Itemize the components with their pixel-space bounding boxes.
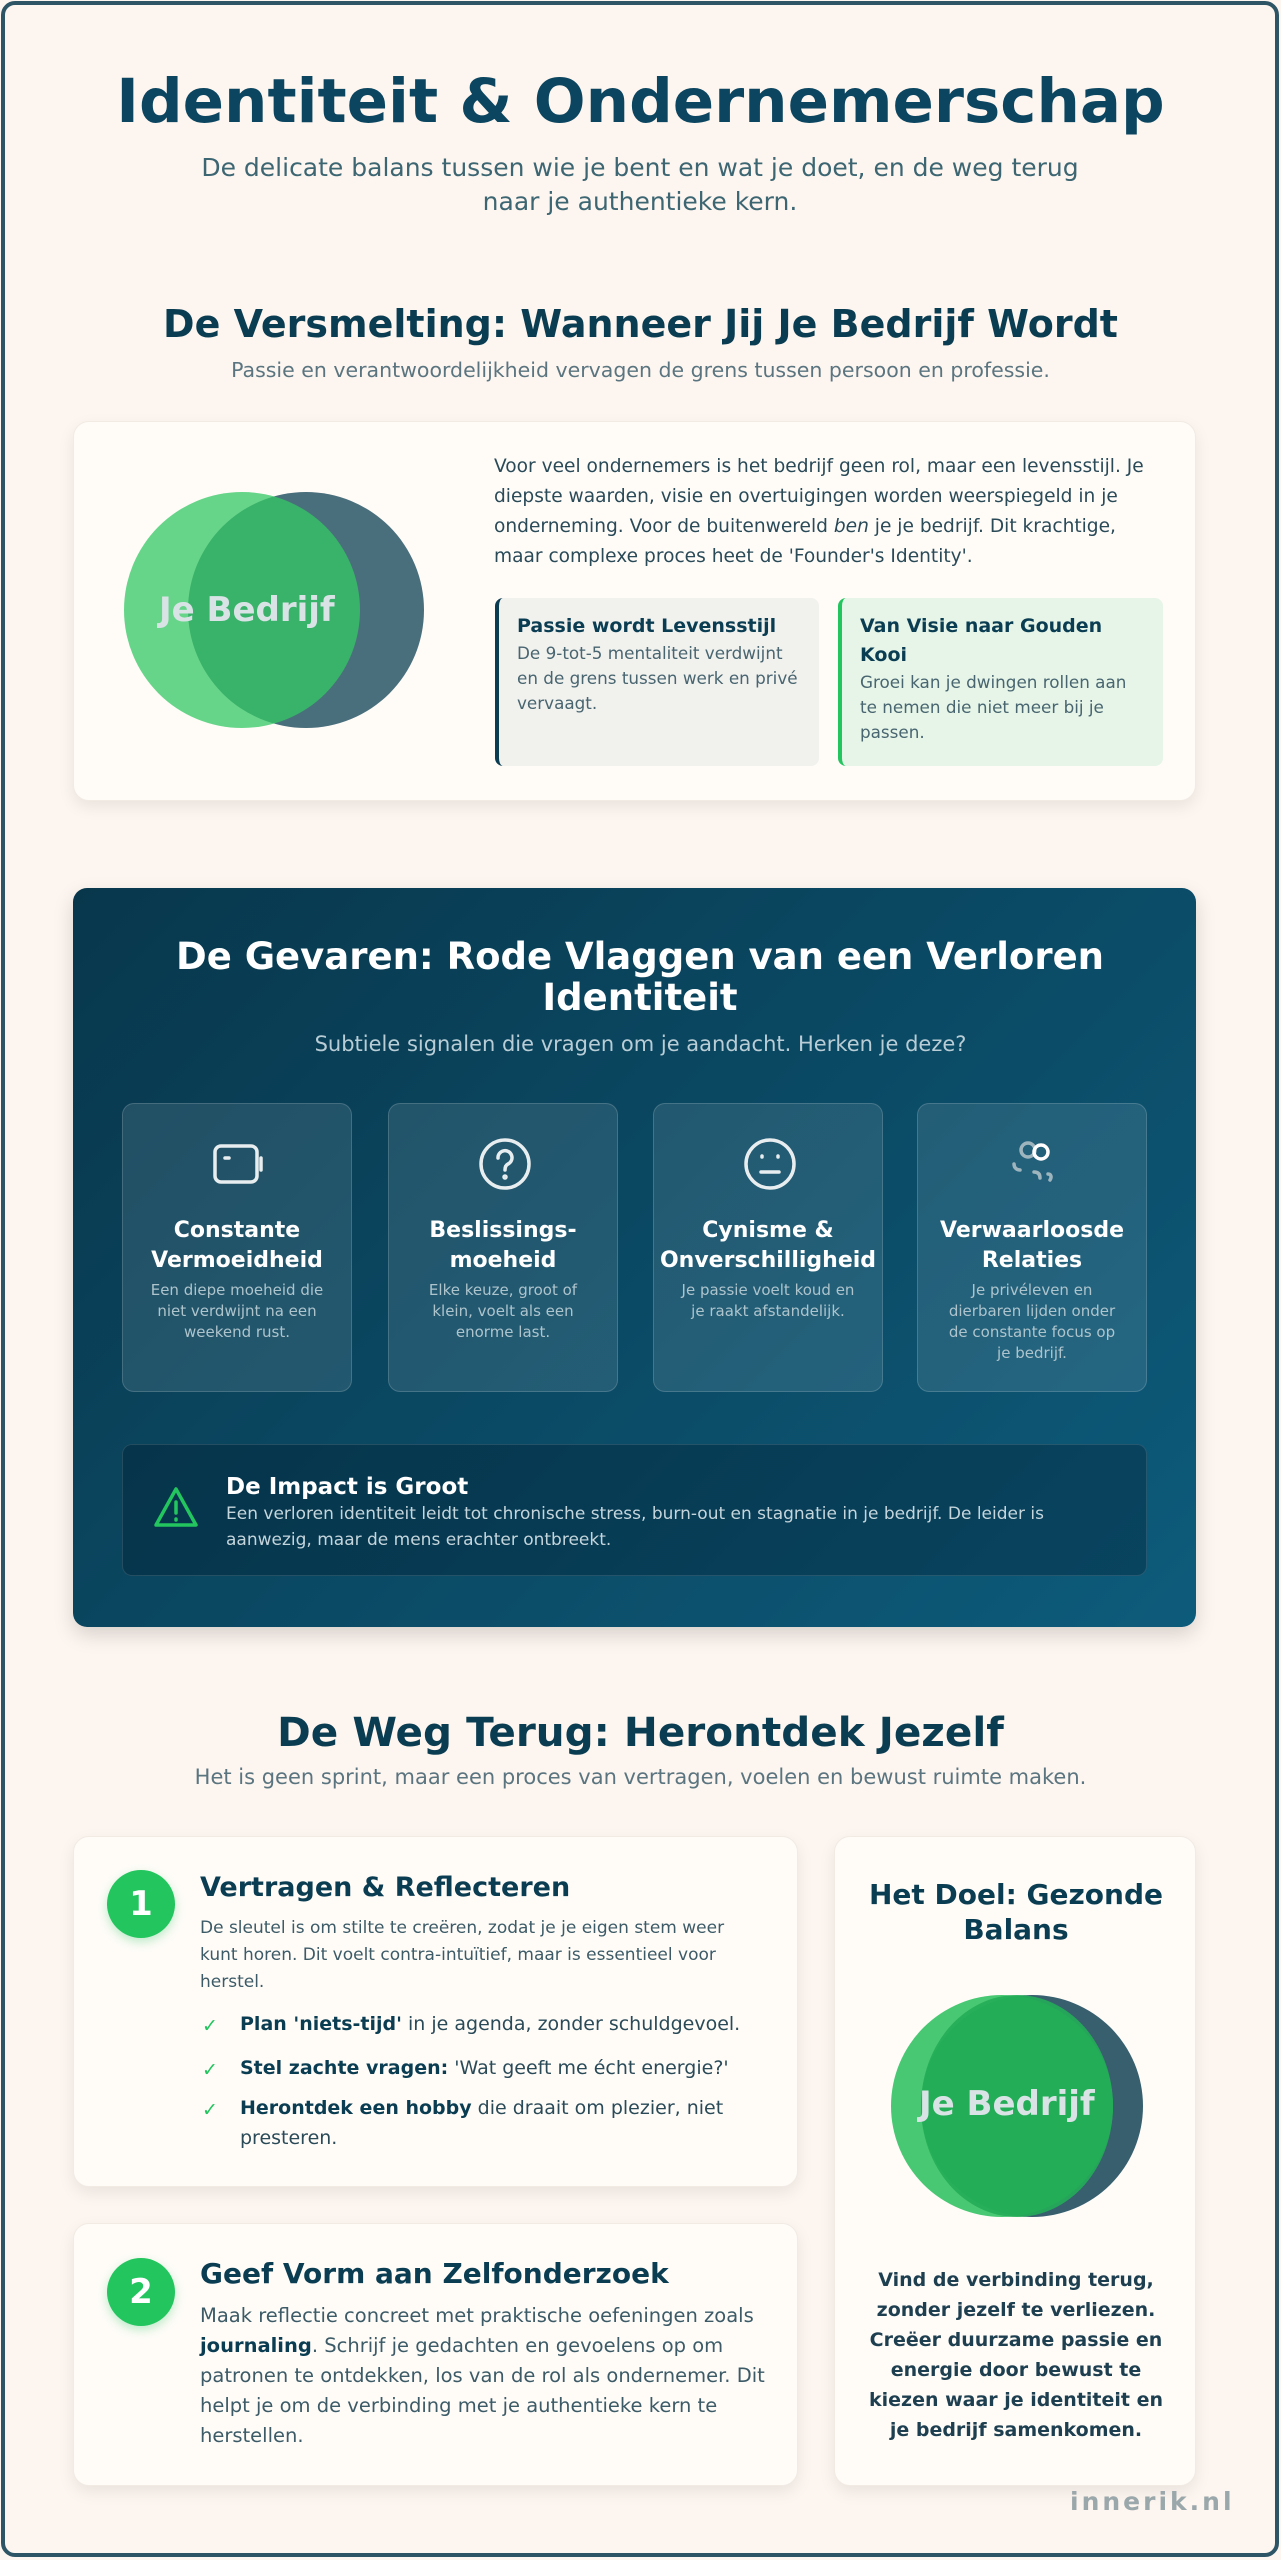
brand: innerik.nl (1070, 2487, 1235, 2516)
section 1 subheading: Passie en verantwoordelijkheid vervagen de grens tussen persoon en professie. (231, 358, 1050, 382)
doel text: Vind de verbinding terug, zonder jezelf te verliezen. Creëer duurzame passie en energie door bewust te kiezen waar je identiteit en je bedrijf samenkomen. (869, 2269, 1163, 2441)
card: vermoeidheid (122, 1103, 352, 1392)
number 2 (107, 2258, 175, 2326)
box: passie (495, 598, 819, 766)
icon: warning (154, 1487, 198, 1527)
panel: gevaren (73, 888, 1196, 1627)
number 1 (107, 1870, 175, 1938)
number 1: 1 (129, 1884, 153, 1924)
step 2 title: Geef Vorm aan Zelfonderzoek (200, 2257, 669, 2290)
icon: neutral face (744, 1138, 796, 1190)
icon: people (1012, 1141, 1053, 1182)
callout: impact (122, 1444, 1147, 1576)
card: beslissingsmoeheid: Beslissings- (429, 1218, 577, 1243)
panel: versmelting (73, 421, 1196, 801)
card: relaties: Verwaarloosde Relaties (940, 1218, 1124, 1273)
checklist (202, 2013, 740, 2149)
doel title: Balans (963, 1913, 1069, 1946)
card: step 1 (73, 1836, 798, 2187)
venn balanced (891, 1995, 1143, 2217)
number 2: 2 (129, 2272, 153, 2312)
callout: impact: Een verloren identiteit leidt tot chronische stress, burn-out en stagnatie in je bedrijf. De leider is aanwezig, maar de mens erachter ontbreekt. (226, 1504, 1044, 1550)
card: step 2 (73, 2223, 798, 2486)
card: cynisme (653, 1103, 883, 1392)
checklist: Stel zachte vragen: 'Wat geeft me écht energie?' (240, 2057, 729, 2079)
step 2 text: Maak reflectie concreet met praktische oefeningen zoals journaling. Schrijf je gedachten en gevoelens op om patronen te ontdekken, los van de rol als ondernemer. Dit helpt je om de verbinding met je authentieke kern te herstellen. (200, 2304, 765, 2447)
gevaren heading: De Gevaren: Rode Vlaggen van een Verloren Identiteit (176, 935, 1104, 1019)
box: visie: Groei kan je dwingen rollen aan te nemen die niet meer bij je passen. (860, 672, 1126, 742)
intro text: Voor veel ondernemers is het bedrijf geen rol, maar een levensstijl. Je diepste waarden, visie en overtuigingen worden weerspiegeld in je onderneming. Voor de buitenwereld ben je je bedrijf. Dit krachtige, maar complexe proces heet de 'Founder's Identity'. (494, 456, 1144, 567)
box: visie: Van Visie naar Gouden Kooi (860, 615, 1102, 666)
venn diagram: Je Bedrijf (159, 590, 335, 630)
venn balanced: Je Bedrijf (919, 2084, 1095, 2124)
section 3 heading: De Weg Terug: Herontdek Jezelf (277, 1708, 1004, 1756)
icon: battery (213, 1144, 263, 1184)
card: beslissingsmoeheid (388, 1103, 618, 1392)
card: beslissingsmoeheid: Elke keuze, groot of klein, voelt als een enorme last. (429, 1281, 577, 1341)
checklist: ✓ (202, 2059, 218, 2081)
subtitle: De delicate balans tussen wie je bent en wat je doet, en de weg terug naar je authentieke kern. (201, 153, 1079, 216)
checklist: Herontdek een hobby die draait om plezier, niet presteren. (240, 2097, 723, 2149)
card: cynisme: Cynisme & Onverschilligheid (660, 1218, 876, 1273)
checklist: ✓ (202, 2015, 218, 2037)
checklist: Plan 'niets-tijd' in je agenda, zonder schuldgevoel. (240, 2013, 740, 2035)
step 1 title: Vertragen & Reflecteren (200, 1872, 570, 1903)
venn diagram (124, 492, 424, 728)
doel title (869, 1878, 1163, 1946)
checklist: ✓ (202, 2099, 218, 2121)
section 3 subheading: Het is geen sprint, maar een proces van vertragen, voelen en bewust ruimte maken. (195, 1765, 1086, 1789)
card: beslissingsmoeheid: moeheid (450, 1248, 556, 1273)
step 1 text: De sleutel is om stilte te creëren, zodat je je eigen stem weer kunt horen. Dit voelt contra-intuïtief, maar is essentieel voor herstel. (200, 1918, 724, 1992)
gevaren subheading: Subtiele signalen die vragen om je aandacht. Herken je deze? (315, 1032, 966, 1056)
box: visie (838, 598, 1163, 766)
section 1 heading: De Versmelting: Wanneer Jij Je Bedrijf Wordt (163, 302, 1118, 346)
box: passie: De 9-tot-5 mentaliteit verdwijnt en de grens tussen werk en privé vervaagt. (517, 643, 798, 713)
card: doel (834, 1836, 1196, 2486)
title: Identiteit & Ondernemerschap (116, 66, 1165, 137)
card: relaties (917, 1103, 1147, 1392)
icon: question (479, 1138, 531, 1190)
card: relaties: Je privéleven en dierbaren lijden onder de constante focus op je bedrijf. (949, 1281, 1115, 1362)
card: cynisme: Je passie voelt koud en je raakt afstandelijk. (682, 1281, 854, 1320)
card: vermoeidheid: Constante Vermoeidheid (151, 1218, 323, 1273)
card: vermoeidheid: Een diepe moeheid die niet verdwijnt na een weekend rust. (151, 1281, 323, 1341)
box: passie: Passie wordt Levensstijl (517, 615, 776, 637)
doel title: Het Doel: Gezonde (869, 1878, 1163, 1911)
callout: impact: De Impact is Groot (226, 1474, 468, 1500)
